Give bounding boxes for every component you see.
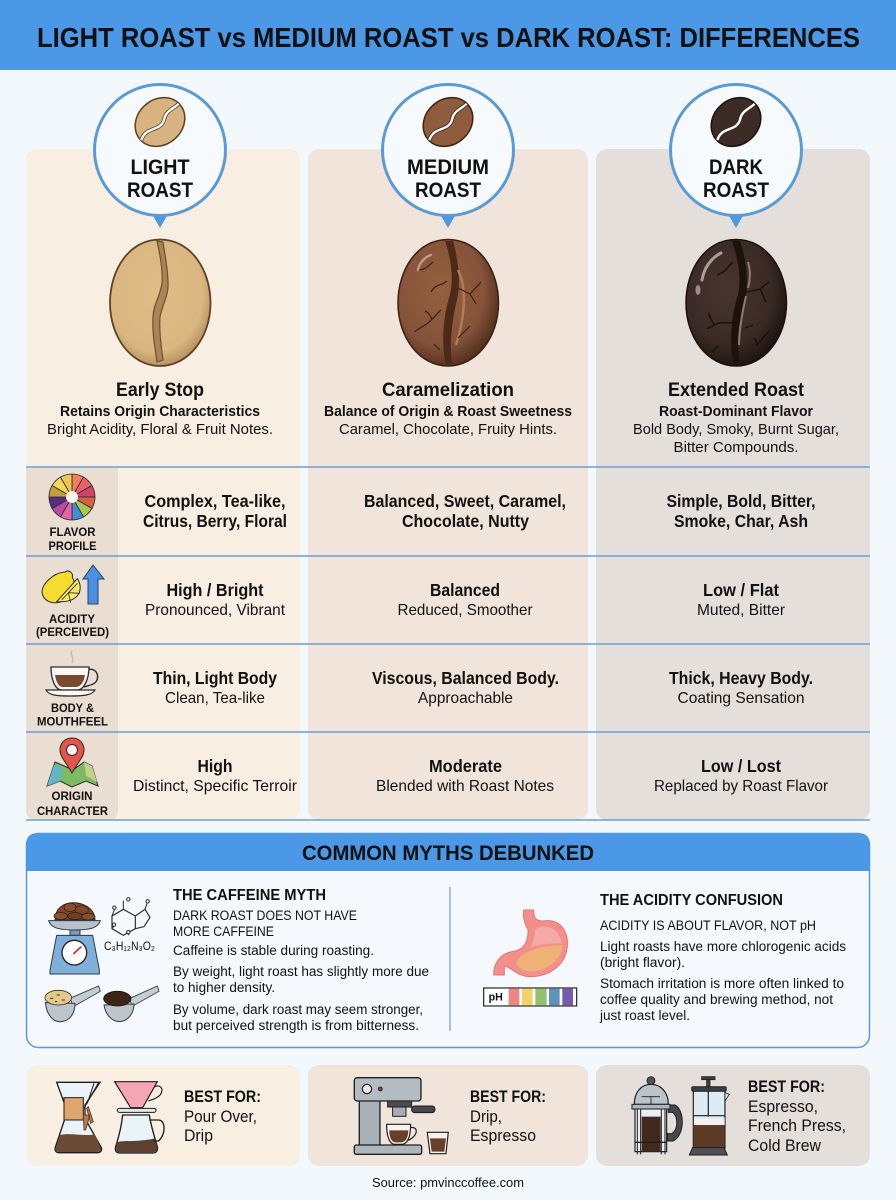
text: acidity confusion: Light roasts have more chlorogenic acids — [600, 939, 846, 954]
text: acidity confusion: just roast level. — [599, 1008, 690, 1023]
cell: medium origin — [376, 756, 554, 795]
badge label: LIGHT — [130, 156, 190, 179]
cell: dark origin: Replaced by Roast Flavor — [654, 778, 829, 795]
icon: pour-over dripper and carafe — [115, 1082, 164, 1153]
row label: acidity perceived — [36, 565, 109, 639]
cell: light body — [153, 668, 277, 707]
text: best for medium: Espresso — [470, 1127, 536, 1145]
text: best for dark — [748, 1078, 846, 1155]
text: best for medium: Drip, — [470, 1108, 502, 1126]
text: caffeine myth: Caffeine is stable during roasting. — [173, 943, 374, 958]
panel: common myths debunked — [26, 833, 870, 1048]
text: caffeine myth: THE CAFFEINE MYTH — [173, 887, 326, 904]
cell: dark flavor: Smoke, Char, Ash — [674, 511, 808, 531]
row label: body and mouthfeel — [37, 651, 108, 728]
badge: medium roast: ROAST — [415, 179, 481, 202]
cell: medium acidity — [398, 580, 533, 619]
row label: acidity perceived: (PERCEIVED) — [36, 625, 109, 639]
cell: medium body — [372, 668, 559, 707]
cell: dark flavor: Simple, Bold, Bitter, — [666, 491, 816, 511]
text: best for dark: BEST FOR: — [748, 1078, 825, 1096]
badge label: MEDIUM — [407, 156, 489, 179]
text: dark roast summary: Roast-Dominant Flavor — [659, 404, 813, 420]
illustration: dark roast bean — [686, 240, 786, 366]
label column background — [26, 468, 118, 820]
text: light roast summary: Retains Origin Characteristics — [60, 404, 260, 420]
header banner — [0, 0, 896, 70]
cell: light origin — [133, 756, 298, 795]
badge label: DARK — [709, 156, 763, 179]
icon: chemex — [55, 1082, 102, 1153]
myths header bar — [26, 833, 870, 871]
cell: light flavor — [143, 491, 287, 531]
cell: medium flavor: Chocolate, Nutty — [402, 511, 529, 531]
row label: flavor profile — [48, 474, 96, 553]
illustration: medium roast bean — [398, 240, 498, 366]
cell: dark acidity: Muted, Bitter — [697, 602, 786, 619]
cell: medium origin: Moderate — [429, 756, 502, 776]
badge: dark roast — [670, 84, 802, 228]
cell: dark body: Thick, Heavy Body. — [669, 668, 813, 688]
panel: best for medium roast — [308, 1065, 588, 1166]
caffeine formula: C₃H₁₂N₃O₂ — [104, 939, 155, 953]
text: caffeine myth: but perceived strength is from bitterness. — [173, 1018, 419, 1033]
row label: origin character — [37, 738, 108, 818]
cell: light origin: Distinct, Specific Terroir — [133, 778, 298, 795]
cell: medium acidity: Balanced — [430, 580, 500, 600]
cell: dark acidity — [697, 580, 786, 619]
panel: dark roast column — [596, 84, 870, 820]
text: acidity confusion — [599, 892, 846, 1023]
text: caffeine myth: MORE CAFFEINE — [173, 924, 274, 939]
icon: pH strip: pH — [489, 991, 503, 1003]
icon: pH strip — [484, 988, 577, 1006]
icon: light scoop — [45, 986, 100, 1022]
row label: flavor profile: FLAVOR — [50, 525, 96, 539]
icon: stomach — [494, 910, 567, 977]
panel: medium roast column — [308, 84, 588, 820]
row label: body and mouthfeel: BODY & — [51, 701, 94, 715]
row label: origin character: CHARACTER — [37, 804, 108, 818]
cell: dark origin: Low / Lost — [701, 756, 781, 776]
text: best for medium: BEST FOR: — [470, 1088, 546, 1106]
text: acidity confusion: (bright flavor). — [600, 955, 685, 970]
cell: medium origin: Blended with Roast Notes — [376, 778, 554, 795]
text: best for dark: French Press, — [748, 1117, 846, 1135]
row label: body and mouthfeel: MOUTHFEEL — [37, 714, 108, 728]
icon: small medium bean — [413, 88, 483, 156]
badge: medium roast — [382, 84, 514, 228]
cell: dark origin — [654, 756, 829, 795]
cell: medium body: Viscous, Balanced Body. — [372, 668, 559, 688]
cell: dark flavor — [666, 491, 816, 531]
text: caffeine myth: to higher density. — [173, 980, 275, 995]
cell: light flavor: Complex, Tea-like, — [144, 491, 286, 511]
icon: french press one — [632, 1077, 682, 1154]
text: light roast summary: Early Stop — [116, 379, 204, 401]
text: best for dark: Cold Brew — [748, 1137, 821, 1155]
text: light roast summary — [47, 379, 273, 438]
text: acidity confusion: ACIDITY IS ABOUT FLAVOR, NOT pH — [600, 918, 816, 933]
text: caffeine myth: DARK ROAST DOES NOT HAVE — [173, 908, 357, 923]
myths heading: COMMON MYTHS DEBUNKED — [302, 842, 594, 865]
cell: light body: Thin, Light Body — [153, 668, 277, 688]
text: dark roast summary: Bold Body, Smoky, Burnt Sugar, — [633, 422, 839, 438]
badge: light roast — [94, 84, 226, 228]
icon: small light bean — [125, 88, 195, 156]
row label: origin character: ORIGIN — [52, 789, 92, 803]
cell: light acidity: High / Bright — [166, 580, 264, 600]
icon: coffee cup — [46, 651, 98, 696]
text: dark roast summary: Bitter Compounds. — [674, 440, 798, 456]
cell: light flavor: Citrus, Berry, Floral — [143, 511, 287, 531]
source credit: Source: pmvinccoffee.com — [372, 1176, 524, 1190]
row label: flavor profile: PROFILE — [48, 539, 96, 553]
text: best for dark: Espresso, — [748, 1098, 818, 1116]
cell: dark acidity: Low / Flat — [703, 580, 779, 600]
text: medium roast summary: Balance of Origin & Roast Sweetness — [324, 404, 572, 420]
cell: dark body — [669, 668, 813, 707]
badge: light roast: ROAST — [127, 179, 193, 202]
text: caffeine myth: By weight, light roast has slightly more due — [173, 964, 429, 979]
cell: medium flavor — [364, 491, 566, 531]
text: acidity confusion: THE ACIDITY CONFUSION — [600, 892, 783, 909]
panel: light roast column — [26, 84, 300, 820]
text: best for light: BEST FOR: — [184, 1088, 261, 1106]
illustration: light roast bean — [110, 240, 210, 366]
cell: dark body: Coating Sensation — [678, 690, 804, 707]
cell: light acidity — [145, 580, 286, 619]
icon: small dark bean — [701, 88, 771, 156]
text: best for light — [184, 1088, 261, 1145]
icon: kitchen scale with beans — [45, 903, 159, 1022]
text: best for light: Pour Over, — [184, 1108, 257, 1126]
icon: french press two — [689, 1077, 729, 1155]
cell: medium acidity: Reduced, Smoother — [398, 602, 533, 619]
text: acidity confusion: coffee quality and brewing method, not — [600, 992, 833, 1007]
text: medium roast summary: Caramel, Chocolate, Fruity Hints. — [339, 422, 557, 438]
cell: medium body: Approachable — [418, 690, 513, 707]
icon: flavor wheel — [49, 474, 95, 520]
icon: up arrow — [83, 565, 104, 604]
cell: light acidity: Pronounced, Vibrant — [145, 602, 286, 619]
text: dark roast summary: Extended Roast — [668, 379, 804, 401]
icon: caffeine molecule — [112, 898, 150, 935]
icon: lemon — [42, 571, 80, 603]
text: dark roast summary — [633, 379, 839, 456]
text: caffeine myth — [173, 887, 429, 1033]
text: best for medium — [470, 1088, 546, 1145]
cell: light origin: High — [198, 756, 232, 776]
text: acidity confusion: Stomach irritation is more often linked to — [600, 976, 844, 991]
cell: medium flavor: Balanced, Sweet, Caramel, — [364, 491, 566, 511]
text: medium roast summary — [324, 379, 572, 438]
badge: dark roast: ROAST — [703, 179, 769, 202]
icon: map with pin — [47, 738, 98, 787]
cell: light body: Clean, Tea-like — [165, 690, 265, 707]
text: best for light: Drip — [184, 1127, 213, 1145]
panel: best for light roast — [26, 1065, 300, 1166]
panel: best for dark roast — [596, 1065, 870, 1166]
icon: dark scoop — [104, 986, 159, 1022]
text: medium roast summary: Caramelization — [382, 379, 514, 401]
icon: espresso machine — [354, 1078, 448, 1154]
text: caffeine myth: By volume, dark roast may seem stronger, — [173, 1002, 423, 1017]
text: light roast summary: Bright Acidity, Floral & Fruit Notes. — [47, 422, 273, 438]
row label: acidity perceived: ACIDITY — [49, 612, 95, 626]
